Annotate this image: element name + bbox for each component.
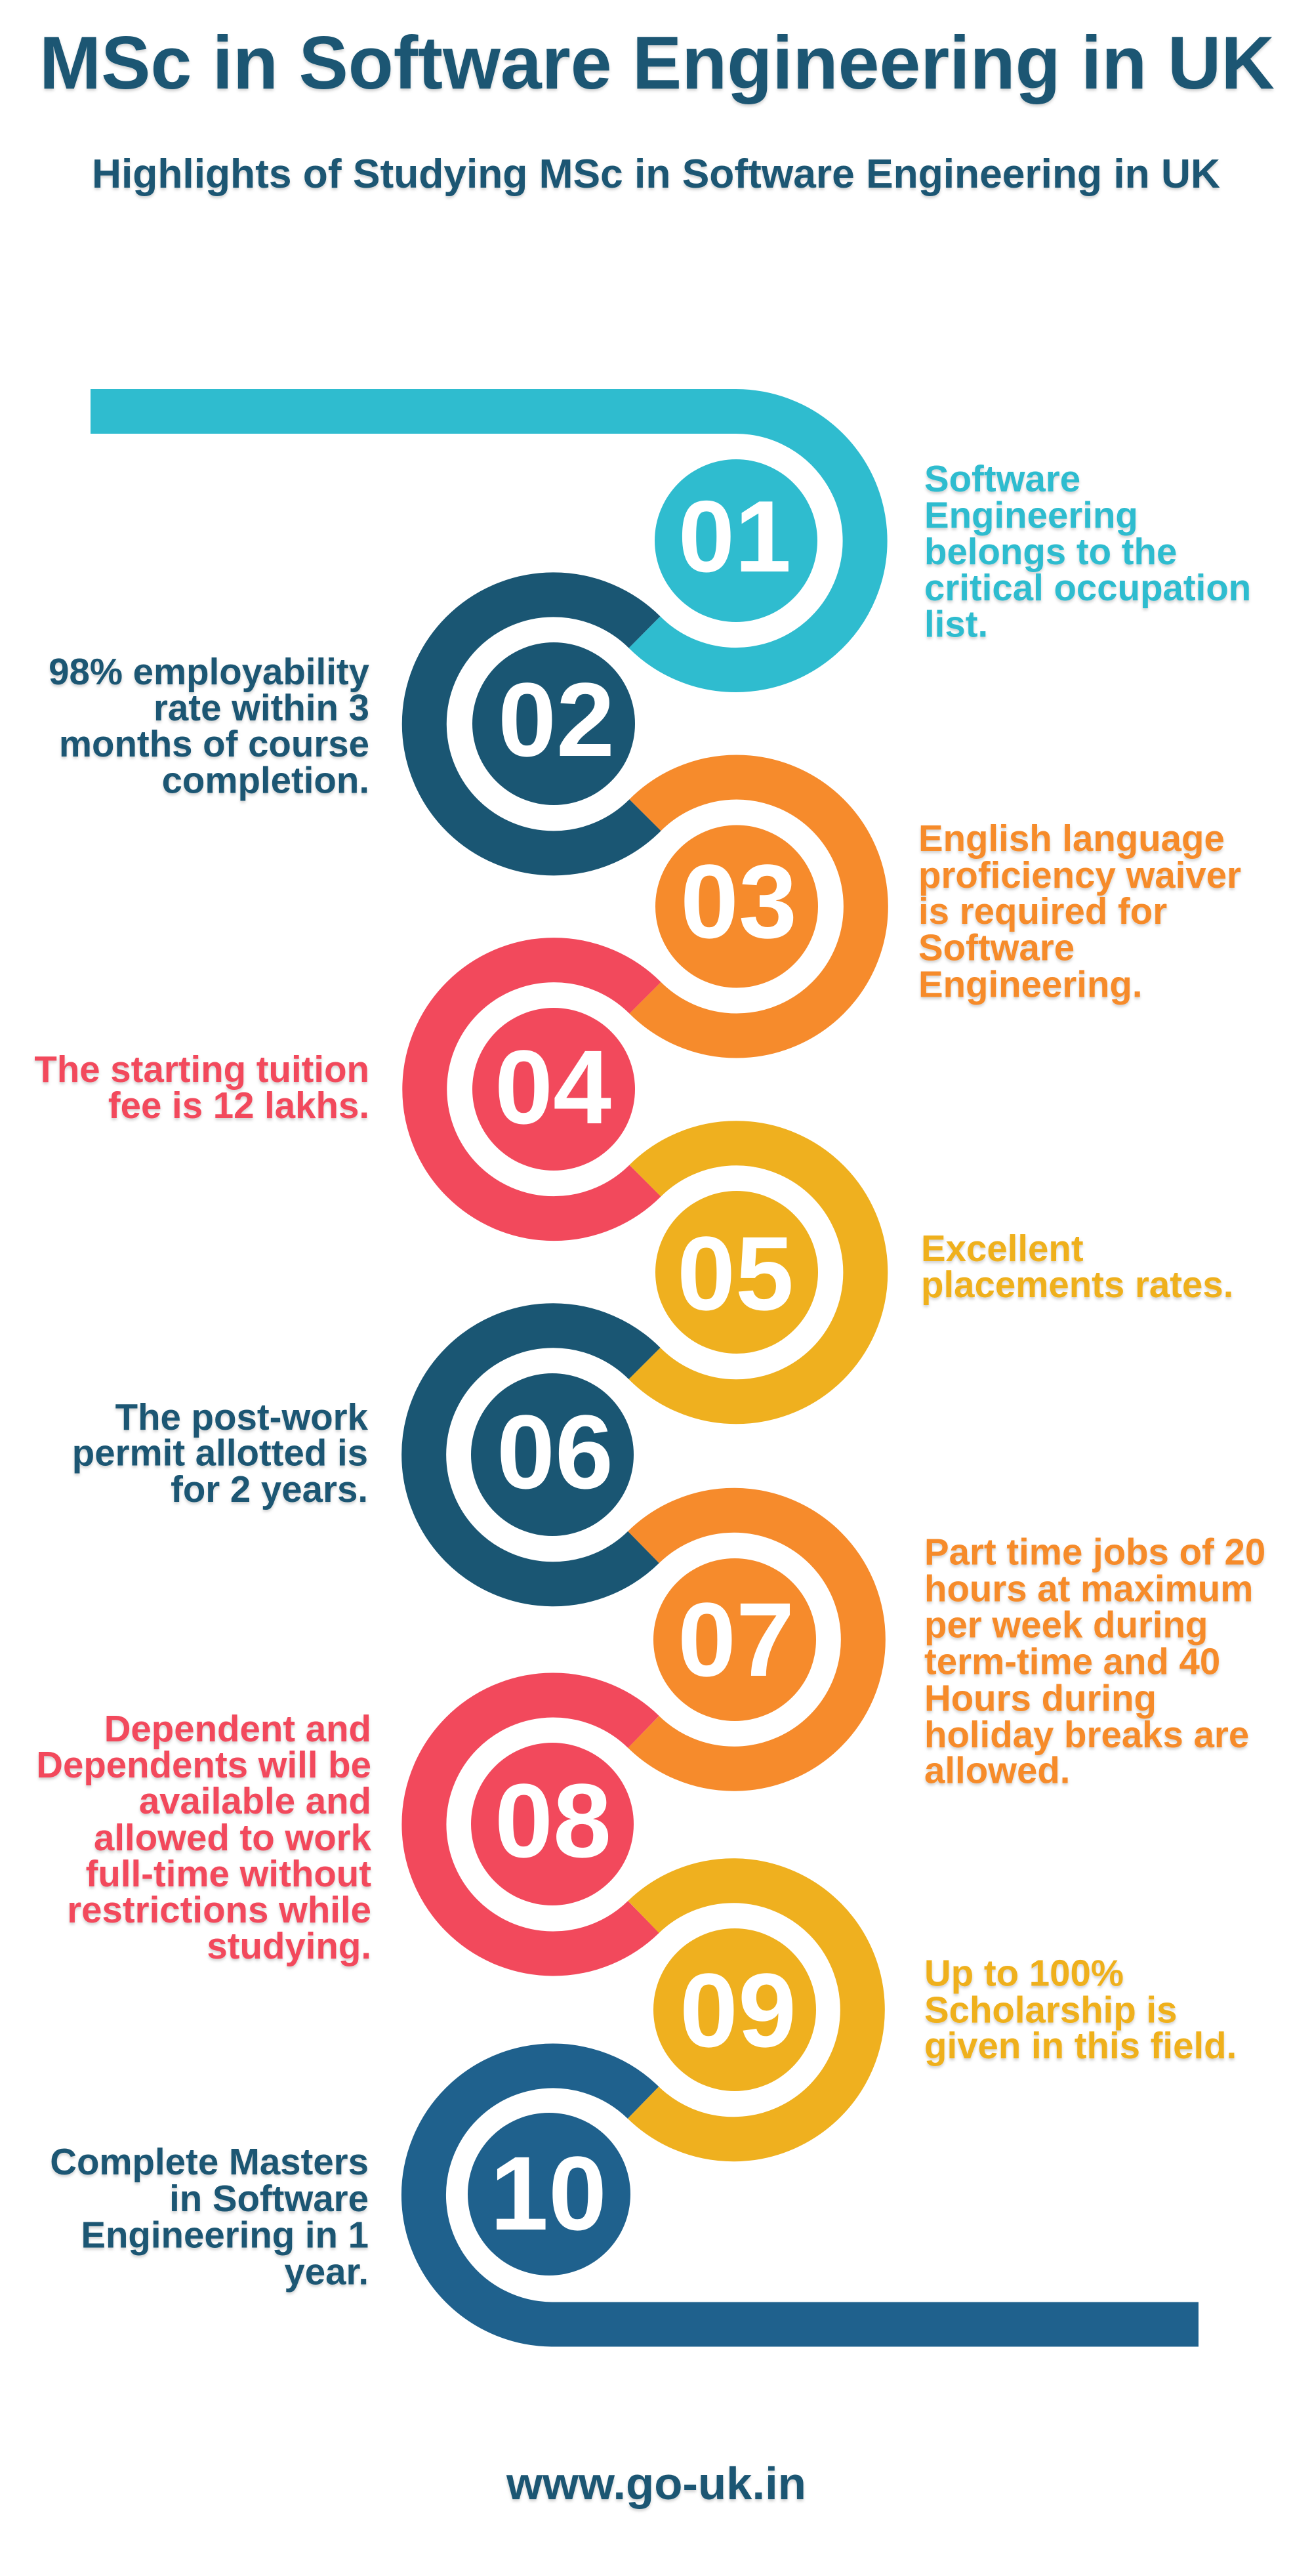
text 06: for 2 years.	[171, 1468, 368, 1510]
text 01	[924, 458, 1251, 644]
text 05	[921, 1228, 1233, 1305]
step 02	[49, 594, 646, 853]
text 10: Engineering in 1	[81, 2214, 369, 2256]
text 04: The starting tuition	[34, 1049, 369, 1090]
text 01: critical occupation	[924, 567, 1251, 608]
text 09: Scholarship is	[924, 1989, 1177, 2030]
number 06: 06	[497, 1393, 613, 1510]
text 07	[924, 1531, 1265, 1791]
text 02: months of course	[59, 723, 369, 764]
text 03: is required for	[918, 890, 1167, 932]
text 10	[50, 2141, 369, 2293]
title: MSc in Software Engineering in UK	[39, 22, 1275, 105]
text 09: given in this field.	[924, 2025, 1237, 2066]
number 02: 02	[498, 661, 615, 778]
text 03: English language	[918, 818, 1225, 859]
text 02: rate within 3	[154, 687, 369, 728]
text 07: allowed.	[924, 1749, 1070, 1791]
text 08: allowed to work	[94, 1817, 372, 1858]
ring 04	[424, 960, 646, 1218]
text 01: Software	[924, 458, 1080, 499]
number 03: 03	[680, 842, 797, 960]
number 09: 09	[680, 1951, 796, 2069]
text 01: Engineering	[924, 495, 1138, 535]
disc 07	[653, 1558, 816, 1721]
disc 02	[472, 642, 635, 805]
text 06: The post-work	[115, 1396, 369, 1438]
ring 01 with top bar	[91, 411, 865, 670]
website footer: www.go-uk.in	[506, 2458, 806, 2509]
disc 09	[653, 1928, 816, 2091]
step 05	[644, 1143, 1233, 1402]
text 08: Dependent and	[104, 1708, 371, 1749]
step 08	[36, 1695, 644, 1966]
step 09	[643, 1880, 1237, 2139]
text 01: list.	[924, 604, 988, 644]
text 07: term-time and 40	[924, 1640, 1220, 1682]
number 08: 08	[495, 1762, 611, 1879]
text 08: available and	[139, 1780, 371, 1821]
text 04: fee is 12 lakhs.	[108, 1085, 369, 1126]
text 07: Hours during	[924, 1677, 1157, 1719]
text 08: full-time without	[86, 1853, 371, 1894]
disc 08	[471, 1743, 634, 1905]
text 08	[36, 1708, 372, 1966]
ring 03	[646, 778, 866, 1035]
step 04	[34, 960, 646, 1218]
number 10: 10	[490, 2134, 607, 2252]
text 07: holiday breaks are	[924, 1714, 1249, 1755]
number 04: 04	[495, 1028, 611, 1146]
subtitle: Highlights of Studying MSc in Software Engineering in UK	[92, 152, 1220, 197]
text 08: studying.	[207, 1925, 371, 1966]
step 06	[72, 1325, 644, 1584]
disc 03	[655, 825, 818, 988]
text 02: completion.	[162, 760, 369, 800]
disc 04	[472, 1008, 635, 1171]
ring 10 with bottom bar	[424, 2066, 1199, 2324]
ring 06	[424, 1325, 644, 1584]
step 01	[91, 411, 1251, 670]
text 07: Part time jobs of 20	[924, 1531, 1265, 1572]
text 03	[918, 818, 1241, 1005]
text 02: 98% employability	[49, 651, 370, 692]
step 03	[646, 778, 1241, 1035]
disc 05	[655, 1191, 818, 1354]
text 04	[34, 1049, 369, 1126]
ring 09	[643, 1880, 863, 2139]
text 03: proficiency waiver	[918, 854, 1241, 896]
text 07: per week during	[924, 1604, 1208, 1646]
number 01: 01	[678, 480, 791, 593]
text 06: permit allotted is	[72, 1432, 368, 1474]
ring 02	[424, 594, 646, 853]
text 10: in Software	[169, 2178, 369, 2219]
text 09	[924, 1953, 1237, 2066]
ring 07	[644, 1510, 863, 1769]
text 03: Engineering.	[918, 963, 1143, 1005]
text 09: Up to 100%	[924, 1953, 1124, 1993]
ring 05	[644, 1143, 865, 1402]
disc 01	[655, 459, 817, 622]
step 10	[50, 2066, 1199, 2324]
text 08: restrictions while	[67, 1889, 371, 1930]
text 01: belongs to the	[924, 531, 1177, 572]
text 10: year.	[284, 2251, 369, 2293]
disc 10	[468, 2113, 630, 2275]
text 05: Excellent	[921, 1228, 1084, 1269]
text 02	[49, 651, 370, 800]
text 06	[72, 1396, 369, 1510]
text 08: Dependents will be	[36, 1744, 371, 1785]
ring 08	[424, 1695, 644, 1953]
text 05: placements rates.	[921, 1264, 1233, 1305]
text 10: Complete Masters	[50, 2141, 369, 2182]
number 05: 05	[677, 1215, 794, 1332]
step 07	[644, 1510, 1265, 1791]
text 07: hours at maximum	[924, 1568, 1253, 1609]
text 03: Software	[918, 926, 1075, 968]
disc 06	[471, 1373, 634, 1536]
number 07: 07	[678, 1581, 794, 1698]
